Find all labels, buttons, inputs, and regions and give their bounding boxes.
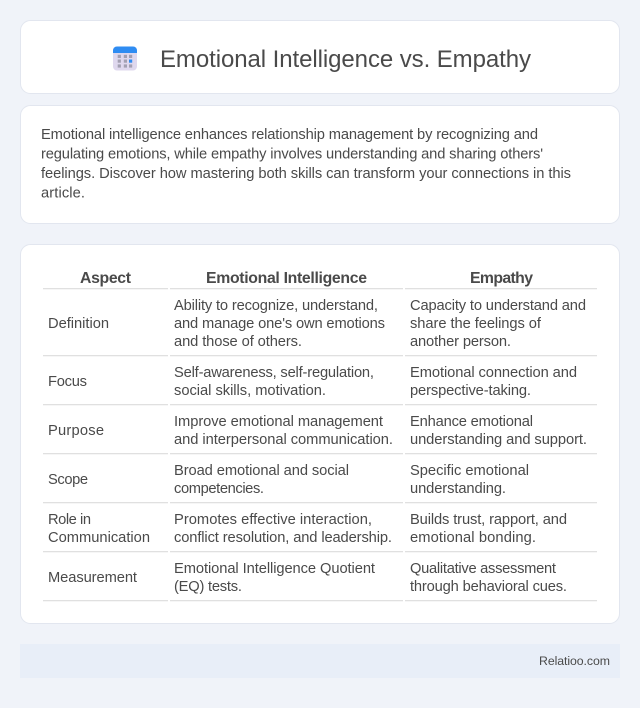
row: scope: competencies.: [174, 481, 264, 497]
table header row: Aspect: [80, 270, 132, 287]
row: focus: [48, 365, 577, 399]
row: role in communication: Promotes effective interaction,: [174, 512, 372, 528]
row: scope: Broad emotional and social: [174, 463, 349, 479]
row: definition: and manage one's own emotions: [174, 316, 385, 332]
row: purpose: and interpersonal communication.: [174, 432, 393, 448]
row: focus: social skills, motivation.: [174, 383, 326, 399]
row: measurement: [48, 561, 567, 595]
icon: calendar: [113, 46, 137, 70]
row: definition: Capacity to understand and: [410, 298, 586, 314]
row: purpose: [48, 414, 587, 448]
row: role in communication: emotional bonding.: [410, 530, 536, 546]
text block: introduction: Emotional intelligence enhances relationship management by recognizing and: [41, 127, 538, 143]
row: scope: understanding.: [410, 481, 506, 497]
text block: introduction: regulating emotions, while empathy involves understanding and sharing others': [41, 146, 543, 162]
title: Emotional Intelligence vs. Empathy: [160, 46, 531, 73]
text block: introduction: article.: [41, 186, 85, 202]
row: role in communication: Builds trust, rapport, and: [410, 512, 567, 528]
row: purpose: understanding and support.: [410, 432, 587, 448]
row: measurement: through behavioral cues.: [410, 579, 567, 595]
row: definition: another person.: [410, 334, 511, 350]
row: purpose: Purpose: [48, 423, 104, 439]
row: definition: Ability to recognize, understand,: [174, 298, 378, 314]
row: measurement: Measurement: [48, 570, 137, 586]
text block: introduction: feelings. Discover how mastering both skills can transform your connections in this: [41, 166, 571, 182]
row: definition: share the feelings of: [410, 316, 542, 332]
row: definition: and those of others.: [174, 334, 302, 350]
row: measurement: Qualitative assessment: [410, 561, 556, 577]
footer: [20, 644, 620, 678]
text block: introduction: [41, 127, 571, 202]
row: focus: Emotional connection and: [410, 365, 577, 381]
row: measurement: (EQ) tests.: [174, 579, 242, 595]
table header row: [80, 270, 533, 287]
row: role in communication: Communication: [48, 530, 150, 546]
row: measurement: Emotional Intelligence Quotient: [174, 561, 375, 577]
table rules: [43, 288, 597, 601]
row: scope: [48, 463, 529, 497]
table header row: Emotional Intelligence: [206, 270, 367, 287]
table header row: Empathy: [470, 270, 533, 287]
row: role in communication: [48, 512, 567, 546]
footer credit: Relatioo.com: [539, 654, 610, 668]
row: definition: [48, 298, 586, 350]
row: role in communication: conflict resolution, and leadership.: [174, 530, 392, 546]
row: scope: Specific emotional: [410, 463, 529, 479]
row: role in communication: Role in: [48, 512, 91, 528]
row: focus: perspective-taking.: [410, 383, 531, 399]
panel: comparison table: [20, 244, 620, 624]
row: focus: Focus: [48, 374, 87, 390]
row: focus: Self-awareness, self-regulation,: [174, 365, 374, 381]
row: scope: Scope: [48, 472, 88, 488]
row: purpose: Enhance emotional: [410, 414, 533, 430]
panel: header: [20, 20, 620, 94]
panel: introduction: [20, 106, 620, 224]
row: definition: Definition: [48, 316, 109, 332]
row: purpose: Improve emotional management: [174, 414, 383, 430]
